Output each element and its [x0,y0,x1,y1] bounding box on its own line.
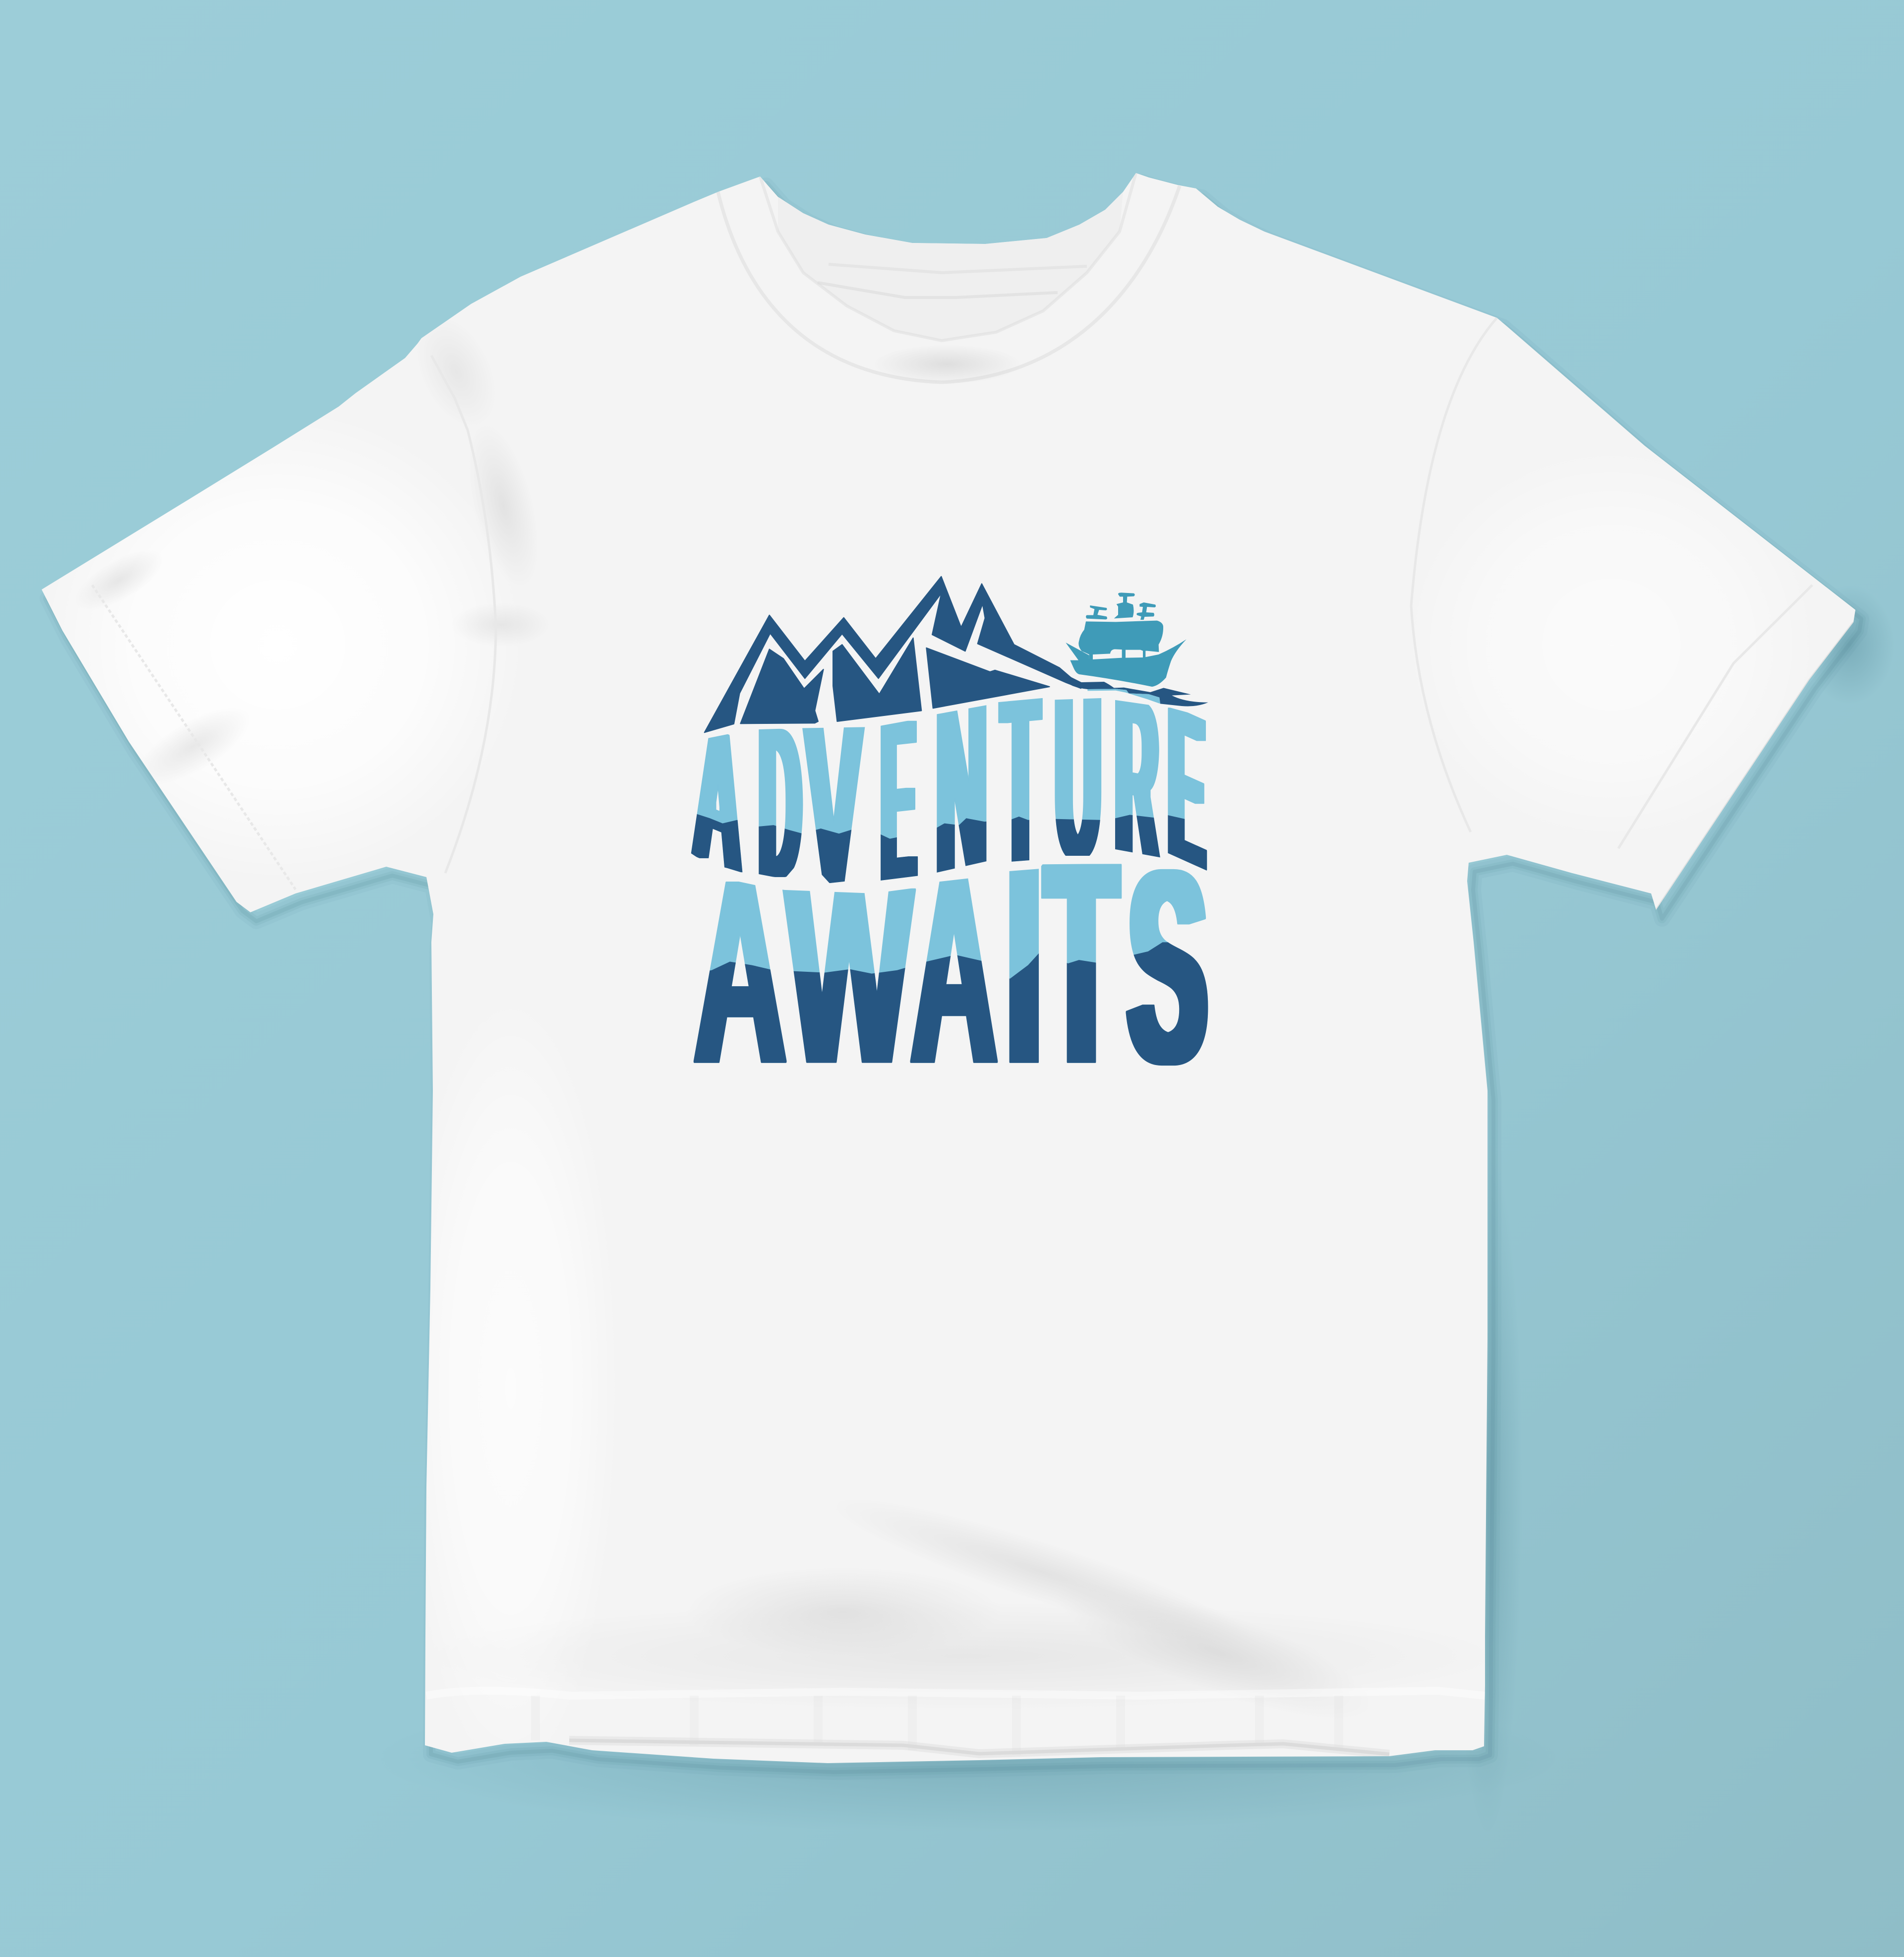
word: AWAITS: S [1129,814,1206,1120]
t-shirt [30,173,1855,1785]
word: AWAITS: T [1046,803,1117,1122]
word: AWAITS: S [1129,814,1206,1120]
word: ADVENTURE: N [937,649,986,928]
light water [1087,689,1160,704]
word: ADVENTURE: R [1116,647,1158,910]
waves [1066,677,1208,707]
word: AWAITS: A [911,821,997,1119]
seams [92,318,1853,910]
word: AWAITS [693,864,1208,1066]
collar [718,173,1180,384]
word: ADVENTURE: N [937,649,986,928]
fabric shading [30,173,1853,1785]
word: AWAITS: I [1008,808,1040,1121]
word: AWAITS: I [1008,808,1040,1121]
mountain inner right [926,648,1050,708]
word: AWAITS: W [786,836,913,1115]
lettering [692,642,1206,1122]
word: ADVENTURE: D [760,678,801,929]
word: AWAITS: A [911,821,997,1119]
word: AWAITS: A [694,827,786,1117]
ship and waves [1066,593,1208,707]
word: ADVENTURE: A [692,678,744,918]
word: ADVENTURE: D [760,678,801,929]
word: ADVENTURE: T [1002,642,1039,918]
word: ADVENTURE: E [1169,655,1204,921]
mountain inner left [740,649,824,723]
word: ADVENTURE: E [1169,655,1204,921]
word: ADVENTURE: E [882,667,915,934]
word: ADVENTURE: E [882,667,915,934]
word: ADVENTURE: V [806,672,862,937]
bottom hem [426,1691,1485,1755]
word: ADVENTURE: U [1056,645,1101,911]
word: ADVENTURE: U [1056,645,1101,911]
word: AWAITS: T [1046,803,1117,1122]
ship [1066,593,1187,687]
word: ADVENTURE: R [1116,647,1158,910]
mountain inner middle [833,638,921,721]
word: AWAITS: W [786,836,913,1115]
word: ADVENTURE: A [692,678,744,918]
word: ADVENTURE: V [806,672,862,937]
word: ADVENTURE [691,698,1207,884]
word: ADVENTURE: T [1002,642,1039,918]
mountains [705,577,1081,732]
mountain outline frame [705,577,1081,732]
word: AWAITS: A [694,827,786,1117]
